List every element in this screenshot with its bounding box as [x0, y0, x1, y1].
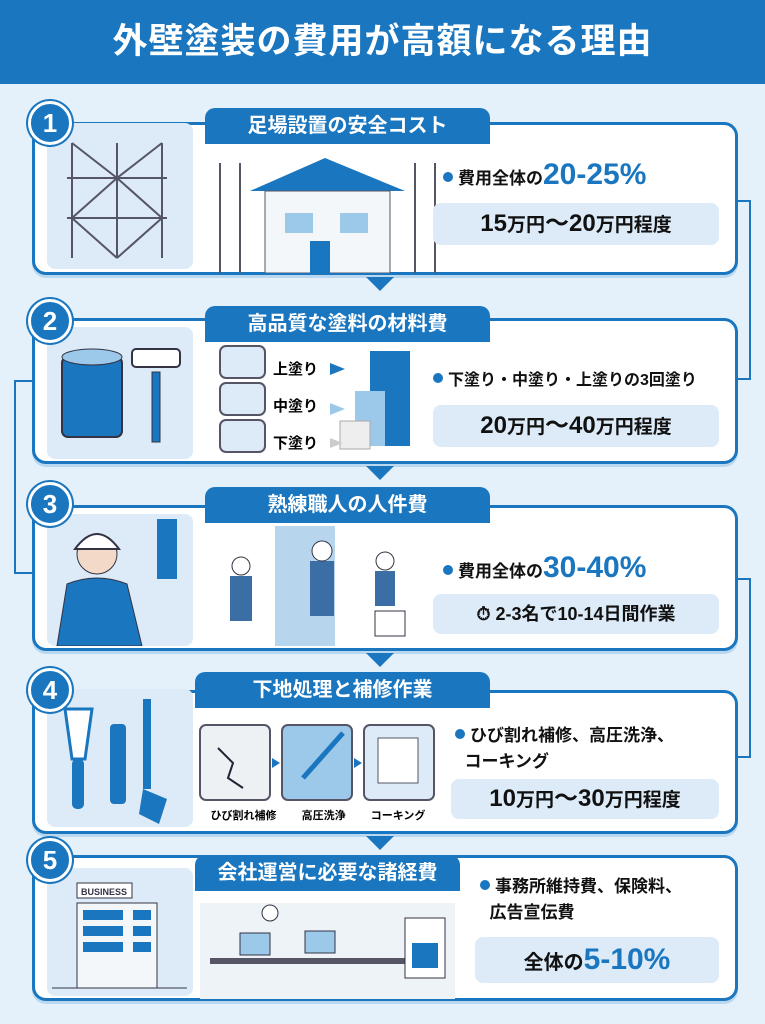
number 4: 4 [43, 675, 57, 705]
number 2: 2 [43, 306, 57, 336]
tab 4 [195, 672, 490, 708]
bullet: items [455, 726, 674, 771]
image: worker [47, 514, 193, 646]
number 4 [28, 668, 72, 712]
image: tools [47, 689, 193, 827]
number 3: 3 [43, 489, 57, 519]
arrow down [366, 836, 394, 850]
tab 1: 足場設置の安全コスト [248, 115, 448, 137]
number 2 [28, 299, 72, 343]
tab 3 [205, 487, 490, 523]
value box [451, 779, 719, 819]
image: coating layers: 上塗り [273, 361, 318, 378]
tab 5 [195, 855, 460, 891]
image: three steps: 高圧洗浄 [302, 810, 346, 822]
tab 5: 会社運営に必要な諸経費 [218, 862, 438, 884]
image: three steps: ひび割れ補修 [211, 810, 277, 822]
image: three steps [199, 724, 435, 822]
image: paint can and roller [47, 327, 193, 459]
bullet: 3 coats: 下塗り・中塗り・上塗りの3回塗り [448, 372, 697, 389]
number 5: 5 [43, 845, 57, 875]
value box: 20万円～40万円程度 [480, 412, 672, 439]
tab 3: 熟練職人の人件費 [268, 494, 428, 516]
tab 1 [205, 108, 490, 144]
number 5 [28, 838, 72, 882]
image: three steps: コーキング [371, 810, 425, 822]
image: coating layers [219, 345, 410, 453]
bullet: items: ひび割れ補修、高圧洗浄、 [470, 726, 674, 745]
image: office [200, 903, 455, 999]
number 1: 1 [43, 108, 57, 138]
value box: 全体の5-10% [524, 943, 670, 976]
bullet: items: 広告宣伝費 [489, 903, 574, 922]
tab 4: 下地処理と補修作業 [252, 679, 432, 701]
title [0, 0, 765, 84]
bullet: items [480, 877, 682, 922]
value box [433, 405, 719, 447]
value box: duration [433, 594, 719, 634]
arrow down [366, 277, 394, 291]
bullet: items: 事務所維持費、保険料、 [495, 877, 682, 896]
tab 2: 高品質な塗料の材料費 [248, 313, 448, 335]
tab 2 [205, 306, 490, 342]
image: house with scaffolding [219, 158, 436, 273]
image: building: BUSINESS [81, 887, 127, 897]
image: coating layers: 下塗り [273, 435, 318, 452]
image: coating layers: 中塗り [273, 398, 318, 415]
bullet: items: コーキング [464, 752, 549, 771]
value box [433, 203, 719, 245]
title: 外壁塗装の費用が高額になる理由 [112, 22, 652, 61]
panel 4: repairs [32, 690, 738, 834]
value box: 15万円～20万円程度 [480, 210, 672, 237]
image: workers painting [230, 526, 406, 646]
number 1 [28, 101, 72, 145]
arrow down [366, 653, 394, 667]
image: scaffolding [47, 123, 193, 269]
image: building [47, 868, 193, 996]
value box: duration: ⏱ 2-3名で10-14日間作業 [476, 604, 676, 624]
bullet: share: 費用全体の30-40% [458, 551, 646, 584]
value box: 10万円～30万円程度 [489, 785, 681, 812]
bullet: share: 費用全体の20-25% [458, 158, 646, 191]
panel 2: paint materials [32, 318, 738, 464]
number 3 [28, 482, 72, 526]
panel 3: labor [32, 505, 738, 651]
arrow down [366, 466, 394, 480]
panel 1: scaffolding [32, 122, 738, 275]
panel 5: overhead [32, 855, 738, 1001]
value box [475, 937, 719, 983]
